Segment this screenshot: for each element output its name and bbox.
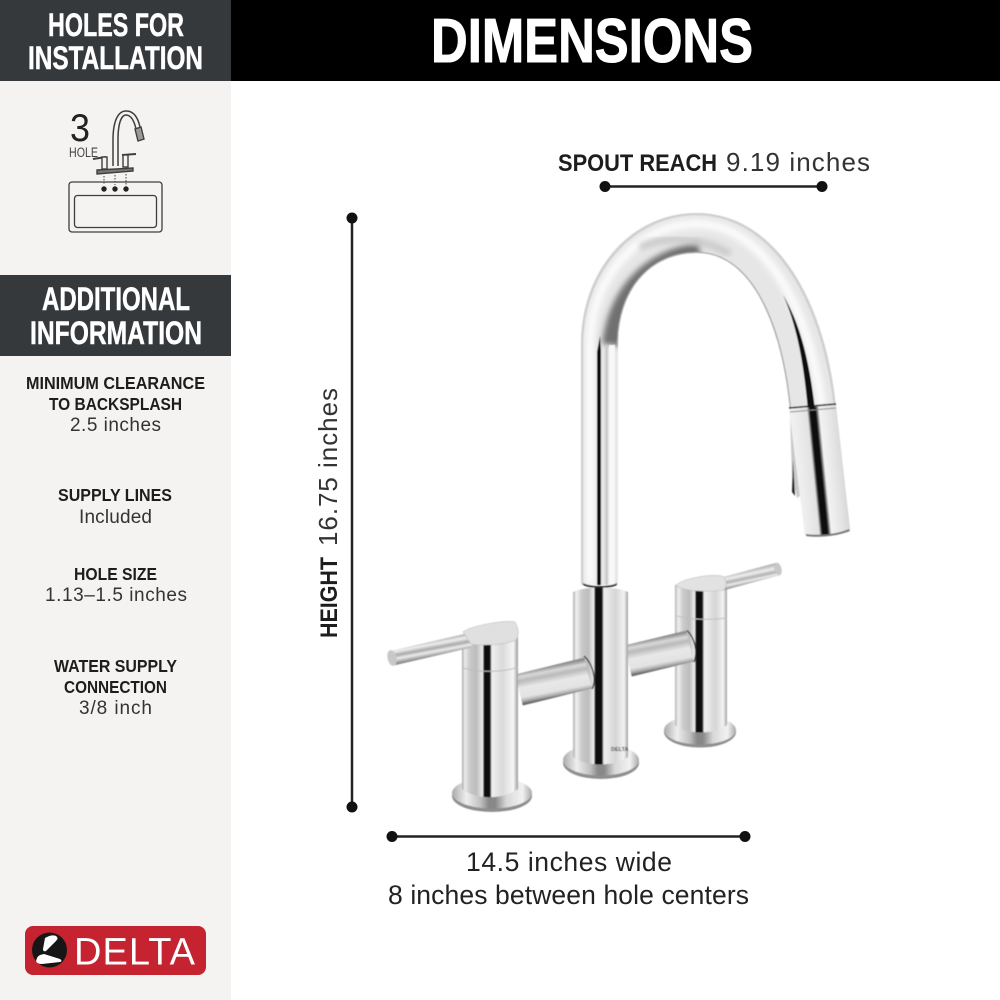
left base xyxy=(452,778,532,812)
left post xyxy=(462,630,518,797)
title: dimensions: DIMENSIONS xyxy=(431,7,753,76)
header: additional information: INFORMATION xyxy=(30,315,202,351)
text: hole size: 1.13–1.5 inches xyxy=(45,585,187,606)
right post xyxy=(675,580,727,732)
text: supply lines: Included xyxy=(79,507,152,528)
icon: three hole sink xyxy=(69,107,162,232)
left crossbar xyxy=(519,656,594,690)
dimension: width: 8 inches between hole centers xyxy=(388,880,749,910)
right lever xyxy=(676,562,783,591)
logo: delta xyxy=(25,926,206,975)
spout collar xyxy=(583,583,617,588)
text: hole size: HOLE SIZE xyxy=(74,564,157,584)
text: water supply connection: WATER SUPPLY xyxy=(54,656,177,676)
icon: three hole sink: 3 xyxy=(70,107,90,150)
left sidebar panel xyxy=(0,81,231,1000)
delta mark on post: DELTA xyxy=(611,747,629,753)
text: supply lines: SUPPLY LINES xyxy=(58,485,172,505)
center base xyxy=(563,744,639,779)
header: holes for installation xyxy=(0,0,231,81)
right base xyxy=(664,716,736,748)
header: additional information: ADDITIONAL xyxy=(42,281,190,317)
text: minimum clearance: 2.5 inches xyxy=(70,415,161,436)
dimension: height: HEIGHT xyxy=(316,557,343,638)
faucet illustration xyxy=(386,213,850,812)
text: supply lines xyxy=(58,485,172,528)
right post seam xyxy=(677,616,727,619)
left lever xyxy=(386,622,518,667)
text: water supply connection: CONNECTION xyxy=(64,677,167,697)
title: dimensions xyxy=(231,0,1000,81)
text: water supply connection xyxy=(54,656,177,719)
logo: delta: DELTA xyxy=(74,932,196,974)
icon: three hole sink: HOLE xyxy=(69,145,98,160)
text: minimum clearance xyxy=(26,373,205,436)
center post xyxy=(573,588,628,764)
header: additional information xyxy=(0,275,231,356)
text: hole size xyxy=(45,564,187,606)
dimension: height: 16.75 inches xyxy=(313,388,343,546)
dimension: width: 14.5 inches wide xyxy=(466,847,672,877)
dimension: height xyxy=(313,212,358,812)
header: holes for installation: HOLES FOR xyxy=(48,7,184,43)
text: minimum clearance: MINIMUM CLEARANCE xyxy=(26,373,205,393)
spout xyxy=(581,213,836,585)
spray head xyxy=(789,404,850,537)
left post seam xyxy=(463,667,518,671)
dimension: width xyxy=(386,831,750,910)
text: water supply connection: 3/8 inch xyxy=(79,698,152,719)
right crossbar xyxy=(628,630,696,662)
dimension: spout reach: 9.19 inches xyxy=(726,147,870,177)
header: holes for installation: INSTALLATION xyxy=(28,40,203,76)
dimension: spout reach: SPOUT REACH xyxy=(558,150,717,177)
dimension: spout reach xyxy=(558,147,870,192)
text: minimum clearance: TO BACKSPLASH xyxy=(49,394,182,414)
